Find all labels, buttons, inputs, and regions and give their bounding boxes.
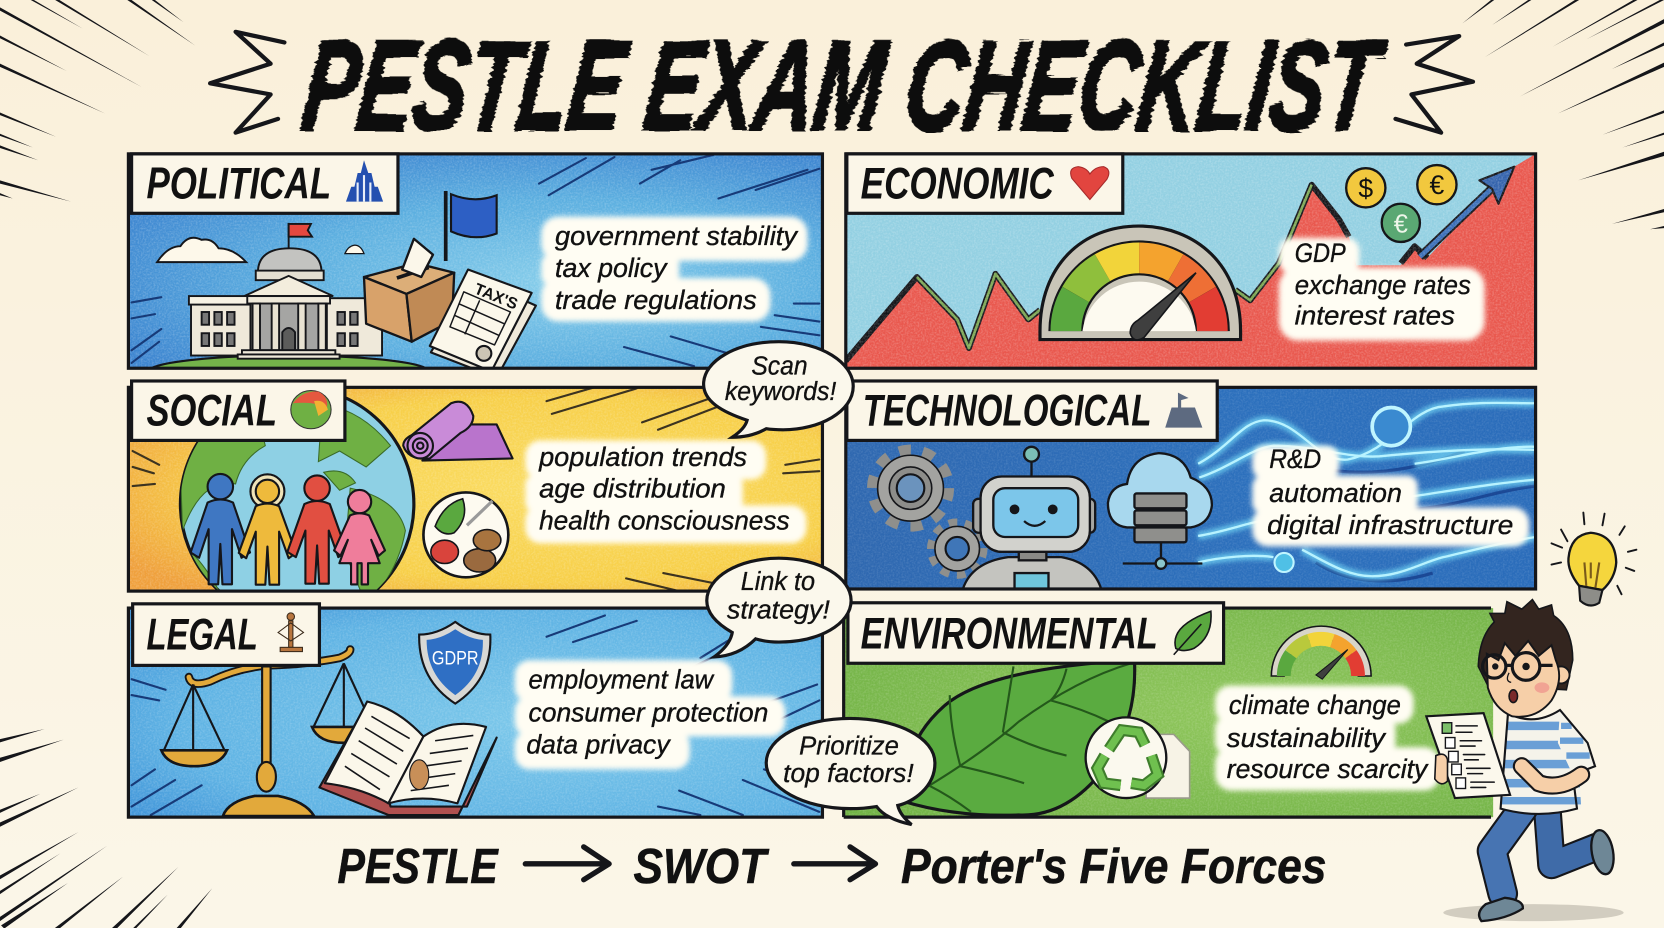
light bulb [1552, 513, 1636, 606]
framework flow: PESTLE to SWOT to Porter's Five Forces: SWOT [634, 840, 770, 894]
speed lines: top left corner [0, 0, 195, 202]
technological note [1252, 444, 1529, 547]
social background [128, 387, 822, 591]
panel: environmental [844, 603, 1493, 817]
yoga mat [403, 402, 513, 461]
coin: green euro [1382, 204, 1420, 242]
glasses [1483, 653, 1553, 680]
open mouth [1509, 690, 1518, 703]
tax document: TAX'S [472, 281, 520, 313]
legal label: LEGAL [146, 610, 258, 659]
social note: age distribution [539, 474, 726, 504]
speech bubble: link to strategy: strategy! [727, 597, 830, 625]
icon: leaf [1174, 611, 1211, 655]
speech bubble: scan keywords: keywords! [725, 378, 836, 406]
economic sky [846, 154, 1536, 368]
title starburst left [210, 32, 284, 133]
panel: technological [846, 381, 1536, 590]
GDPR shield [419, 622, 490, 704]
political action lines [132, 155, 819, 366]
gauge [1040, 226, 1241, 340]
hand holding paper [1435, 754, 1448, 784]
legal note: employment law [528, 665, 715, 695]
environmental note [1215, 686, 1440, 791]
social note: health consciousness [539, 506, 790, 536]
technological note: digital infrastructure [1267, 510, 1513, 540]
technological border [846, 387, 1536, 589]
arm [1522, 766, 1581, 786]
cloud server [1108, 453, 1212, 569]
environmental note: resource scarcity [1227, 754, 1429, 784]
political label: POLITICAL [146, 159, 331, 208]
coin: green euro: € [1394, 210, 1408, 238]
person: red [287, 475, 347, 584]
political note: tax policy [555, 253, 668, 283]
political note [541, 216, 808, 322]
legal border [128, 608, 822, 817]
coin: euro [1417, 165, 1457, 204]
legal note: data privacy [526, 729, 671, 759]
social label: SOCIAL [146, 387, 277, 436]
person: yellow [239, 474, 296, 585]
environmental label: ENVIRONMENTAL [861, 609, 1158, 658]
environmental note: climate change [1229, 690, 1401, 720]
chart line [846, 185, 1427, 361]
environmental border [844, 608, 1491, 817]
cloud [157, 238, 246, 262]
person: pink [334, 490, 385, 584]
recycle symbol with document [1086, 717, 1190, 798]
small cloud [345, 245, 364, 254]
shoes [1479, 828, 1617, 921]
tax document [430, 270, 536, 378]
legal note [515, 660, 785, 769]
speech bubble: scan keywords: Scan [751, 353, 808, 381]
technological note: automation [1269, 478, 1402, 508]
political border [128, 154, 822, 368]
political background [128, 154, 822, 368]
economic note: interest rates [1295, 301, 1455, 331]
head [1478, 600, 1573, 717]
social action lines [133, 387, 819, 591]
economic note: GDP [1295, 238, 1346, 268]
panel: social [126, 379, 824, 593]
framework flow: PESTLE to SWOT to Porter's Five Forces [337, 840, 1327, 894]
large green leaf [903, 660, 1135, 815]
social label [132, 381, 345, 440]
political note: government stability [555, 221, 799, 251]
icon: tower [346, 160, 383, 202]
economic red mountain chart [846, 154, 1536, 368]
economic note: exchange rates [1295, 270, 1471, 300]
checklist paper [1426, 713, 1510, 798]
legal note: consumer protection [528, 698, 768, 728]
speech bubble: prioritize top factors: top factors! [783, 760, 914, 788]
people holding hands [191, 474, 385, 585]
arrow 1 [525, 847, 609, 880]
economic note [1279, 238, 1485, 341]
open law book [319, 701, 497, 815]
political note: trade regulations [555, 285, 757, 315]
speech bubble: link to strategy [707, 558, 851, 657]
icon: small scale [278, 613, 304, 652]
coin: euro: € [1430, 170, 1445, 200]
striped shirt [1491, 710, 1597, 814]
plate of food [423, 492, 508, 577]
technological note: R&D [1269, 444, 1321, 474]
small gauge [1271, 626, 1371, 679]
legal action lines [132, 616, 819, 815]
rising arrow [1420, 167, 1514, 257]
person: blue [191, 474, 250, 584]
coin: dollar [1346, 168, 1385, 207]
icon: colourful globe [291, 391, 331, 429]
flag [446, 191, 497, 261]
social border [128, 387, 822, 591]
GDPR shield: GDPR [432, 648, 479, 669]
gauge needle [1130, 273, 1196, 340]
capitol building [189, 223, 382, 359]
balance scale [161, 649, 376, 816]
icon: tower [1165, 393, 1202, 428]
environmental note: sustainability [1227, 723, 1387, 753]
jeans [1492, 809, 1597, 894]
social note: population trends [538, 442, 747, 472]
framework flow: PESTLE to SWOT to Porter's Five Forces: PESTLE [337, 840, 499, 894]
student running with checklist [1426, 600, 1624, 921]
arrow 2 [794, 847, 876, 880]
robot [963, 447, 1102, 590]
panel: economic [846, 154, 1536, 368]
title starburst right [1396, 36, 1473, 133]
technological background [846, 387, 1536, 589]
legal label [133, 604, 319, 665]
panel: legal [128, 604, 822, 817]
social note [525, 440, 807, 543]
coin: dollar: $ [1358, 173, 1373, 203]
framework flow: PESTLE to SWOT to Porter's Five Forces: Porter's Five Forces [901, 840, 1327, 894]
globe with continents [178, 396, 416, 590]
speed lines: top right corner [1462, 0, 1664, 229]
speech bubble: prioritize top factors [766, 718, 935, 825]
speed lines: bottom left corner [0, 729, 212, 928]
ballot box [364, 239, 454, 342]
speech bubble: scan keywords [704, 342, 853, 437]
technological label: TECHNOLOGICAL [863, 387, 1151, 436]
gear: large [873, 451, 948, 525]
grass mound [152, 356, 426, 367]
speech bubble: link to strategy: Link to [741, 568, 815, 596]
gear: small [932, 523, 983, 574]
glowing data waves [1198, 403, 1536, 581]
economic label: ECONOMIC [861, 159, 1054, 208]
environmental background [844, 608, 1493, 817]
panel: political [128, 154, 822, 387]
legal background [128, 608, 822, 817]
title [210, 15, 1473, 157]
speech bubble: prioritize top factors: Prioritize [799, 733, 899, 761]
bulb rays [1552, 513, 1636, 594]
ground shadow [1443, 904, 1624, 921]
economic border [846, 154, 1536, 368]
icon: heart [1071, 167, 1109, 200]
